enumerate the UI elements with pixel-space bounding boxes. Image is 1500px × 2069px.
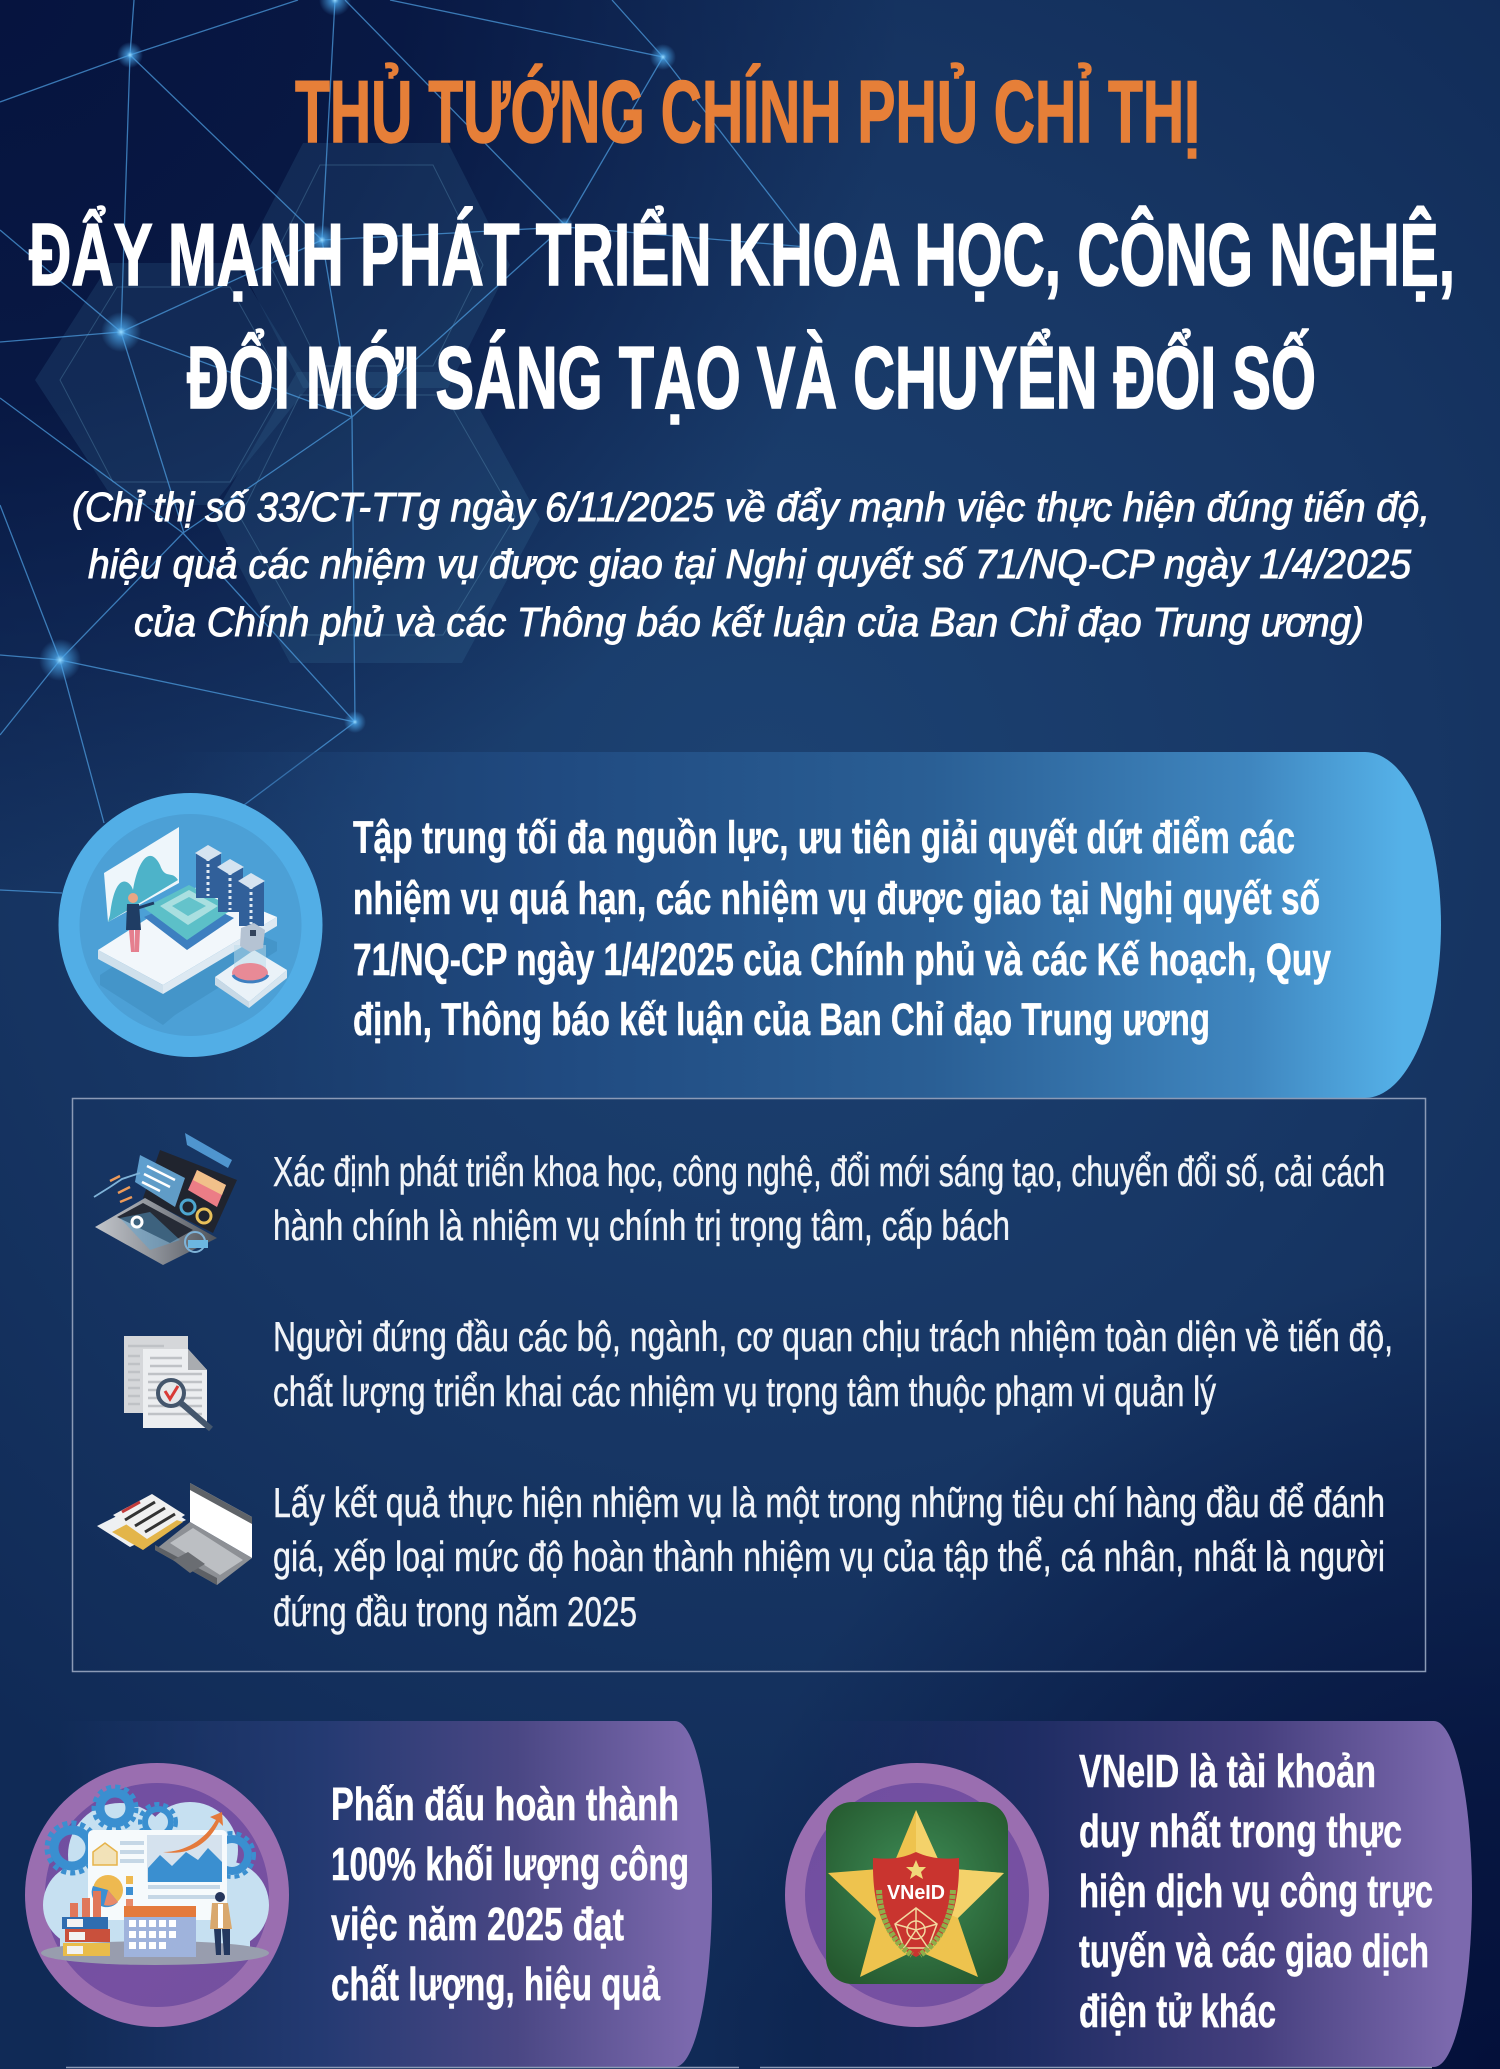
main banner text xyxy=(353,812,1331,1045)
panel: left purple banner xyxy=(60,1721,712,2067)
right banner text: điện tử khác xyxy=(1079,1985,1276,2037)
list item 3 xyxy=(97,1479,1385,1635)
left banner text: chất lượng, hiệu quả xyxy=(331,1958,660,2010)
right banner text: VNeID là tài khoản xyxy=(1079,1745,1376,1797)
list item 2 xyxy=(124,1313,1393,1429)
main banner text: định, Thông báo kết luận của Ban Chỉ đạo Trung ương xyxy=(353,994,1210,1045)
icon: VNeID badge xyxy=(785,1763,1049,2027)
right banner text xyxy=(1079,1745,1433,2037)
icon: VNeID badge: VNeID xyxy=(887,1882,945,1904)
icon: papers and laptop xyxy=(97,1483,252,1585)
panel: main blue banner xyxy=(170,752,1441,1098)
list item 1 xyxy=(94,1133,1385,1265)
list item 3: đứng đầu trong năm 2025 xyxy=(273,1588,637,1635)
panel: list box xyxy=(72,1098,1426,1672)
panel: right purple banner xyxy=(820,1721,1472,2067)
subtitle xyxy=(72,484,1430,645)
left banner text: Phấn đấu hoàn thành xyxy=(331,1778,679,1830)
left banner text xyxy=(331,1778,689,2010)
background hexagons and network xyxy=(0,0,808,893)
left banner text: việc năm 2025 đạt xyxy=(331,1898,624,1950)
icon: documents with magnifier xyxy=(124,1336,211,1429)
list item 1: hành chính là nhiệm vụ chính trị trọng tâm, cấp bách xyxy=(273,1202,1010,1249)
next panels: top borders xyxy=(66,2066,1432,2068)
icon: laptop with holograms xyxy=(94,1133,237,1265)
subtitle: hiệu quả các nhiệm vụ được giao tại Nghị quyết số 71/NQ-CP ngày 1/4/2025 xyxy=(88,541,1411,587)
left banner text: 100% khối lượng công xyxy=(331,1838,689,1890)
subtitle: (Chỉ thị số 33/CT-TTg ngày 6/11/2025 về đẩy mạnh việc thực hiện đúng tiến độ, xyxy=(72,484,1430,530)
title: white xyxy=(29,205,1455,427)
icon: planning and report illustration xyxy=(25,1763,289,2027)
subtitle: của Chính phủ và các Thông báo kết luận của Ban Chỉ đạo Trung ương) xyxy=(134,599,1364,645)
list item 2: chất lượng triển khai các nhiệm vụ trọng tâm thuộc phạm vi quản lý xyxy=(273,1368,1216,1415)
icon: data centre illustration xyxy=(58,793,322,1057)
